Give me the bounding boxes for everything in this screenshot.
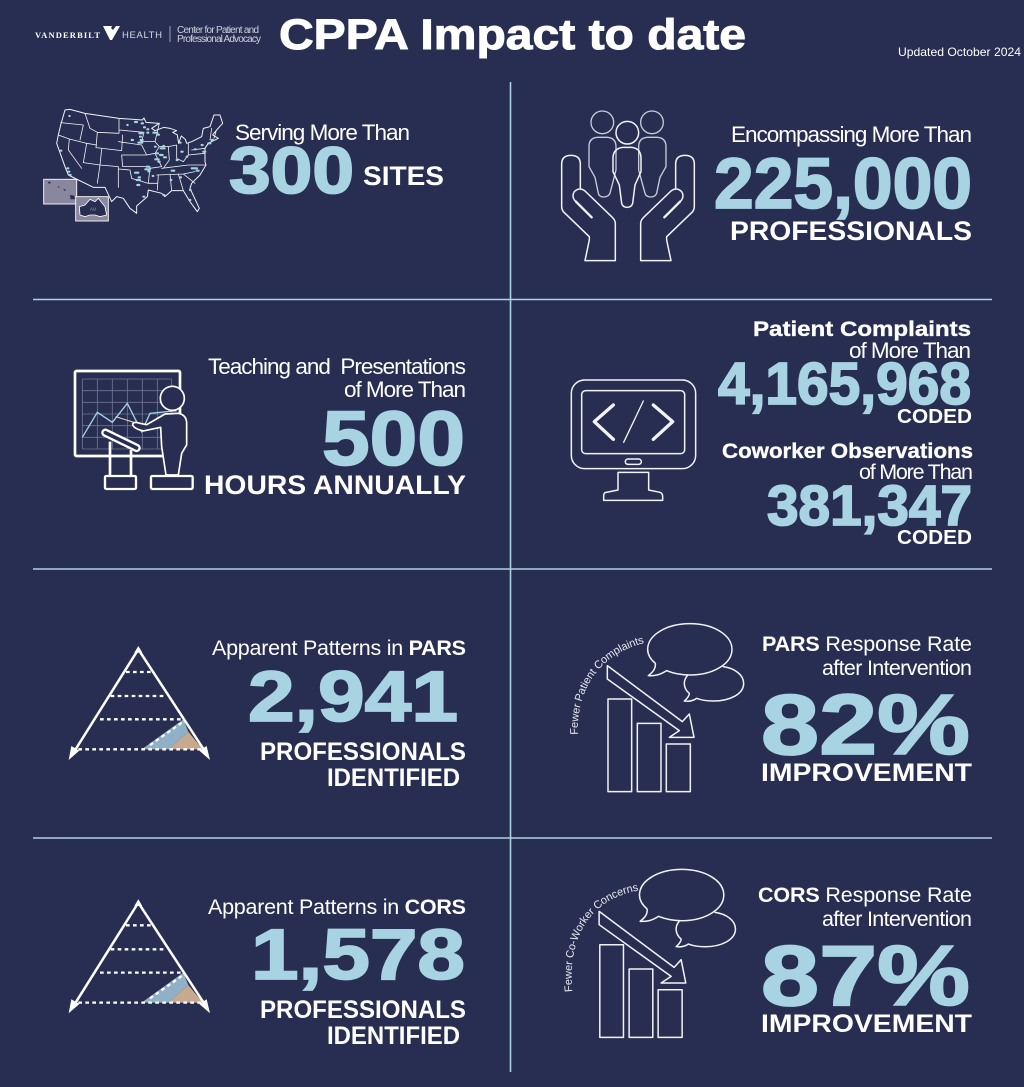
icon: pyramid PARS: [69, 646, 210, 760]
text: patient complaints: Patient Complaints: [753, 317, 971, 341]
panel: CORS patterns: [69, 895, 466, 1050]
text: apparent patterns in PARS: Apparent Patterns in PARS: [212, 636, 466, 660]
text: PARS response rate: PARS Response Rate: [762, 632, 972, 656]
text: serving more than: Serving More Than: [235, 120, 410, 145]
label: hours annually: HOURS ANNUALLY: [204, 470, 466, 500]
text: of more than: of More Than: [344, 377, 466, 402]
icon: presenter at board: [75, 371, 193, 489]
text: after intervention: after Intervention: [822, 907, 972, 931]
panel: PARS response: [570, 622, 972, 792]
map inset: Australia: [76, 197, 108, 221]
icon: falling bars with speech bubbles: [570, 622, 744, 792]
text: of more than: of More Than: [849, 338, 971, 363]
label: professionals: PROFESSIONALS: [260, 996, 466, 1024]
label: identified: IDENTIFIED: [327, 1022, 460, 1050]
text: of more than: of More Than: [859, 460, 973, 484]
icon: US map with site dots: [44, 109, 223, 221]
icon: monitor with code: [571, 380, 696, 500]
number: 225,000: 225,000: [714, 145, 972, 224]
header logo: Center for Patient and: [177, 25, 259, 36]
text: after intervention: after Intervention: [822, 656, 972, 680]
icon: pyramid CORS: [69, 899, 210, 1013]
label: coded: CODED: [897, 406, 972, 428]
text: coworker observations: Coworker Observations: [722, 439, 973, 463]
panel: teaching hours: [75, 354, 466, 500]
label: improvement: IMPROVEMENT: [761, 1010, 972, 1038]
panel: coded reports: [571, 317, 973, 549]
icon: hands holding people: [562, 111, 694, 261]
panel: CORS response: [564, 868, 972, 1038]
label: sites: SITES: [363, 161, 444, 191]
text: encompassing more than: Encompassing More Than: [731, 122, 972, 147]
header logo: HEALTH: [122, 30, 162, 41]
label: professionals: PROFESSIONALS: [260, 738, 466, 766]
number: 82%: 82%: [761, 678, 970, 773]
icon: falling bars with speech bubbles: Fewer Patient Complaints: [570, 638, 644, 734]
header logo: Professional Advocacy: [177, 34, 261, 45]
panel: PARS patterns: [69, 636, 466, 792]
icon: falling bars with speech bubbles: [564, 868, 736, 1038]
text: apparent patterns in CORS: Apparent Patterns in CORS: [208, 895, 466, 919]
updated date: Updated October 2024: [898, 45, 1021, 59]
title: CPPA Impact to date: [279, 11, 746, 59]
label: coded: CODED: [897, 527, 972, 549]
number: 381,347: 381,347: [767, 474, 972, 538]
panel: sites: [44, 109, 444, 221]
icon: US map with site dots: AU: [90, 206, 96, 211]
icon: falling bars with speech bubbles: Fewer Co-Worker Concerns: [564, 885, 638, 992]
number: 4,165,968: 4,165,968: [718, 351, 971, 417]
label: identified: IDENTIFIED: [327, 764, 460, 792]
number: 87%: 87%: [761, 929, 970, 1024]
number: 1,578: 1,578: [251, 916, 465, 995]
map inset: Hawaii: [44, 179, 77, 204]
text: CORS response rate: CORS Response Rate: [758, 883, 972, 907]
label: improvement: IMPROVEMENT: [761, 759, 972, 787]
number: 300: 300: [229, 133, 354, 207]
label: professionals: PROFESSIONALS: [730, 216, 972, 246]
text: teaching and presentations: Teaching and Presentations: [208, 354, 466, 379]
number: 2,941: 2,941: [248, 658, 458, 737]
header logo: [35, 25, 261, 45]
icon: Vanderbilt V: [103, 26, 120, 40]
number: 500: 500: [322, 396, 465, 482]
panel: professionals: [562, 111, 972, 261]
header logo: VANDERBILT: [35, 30, 100, 40]
